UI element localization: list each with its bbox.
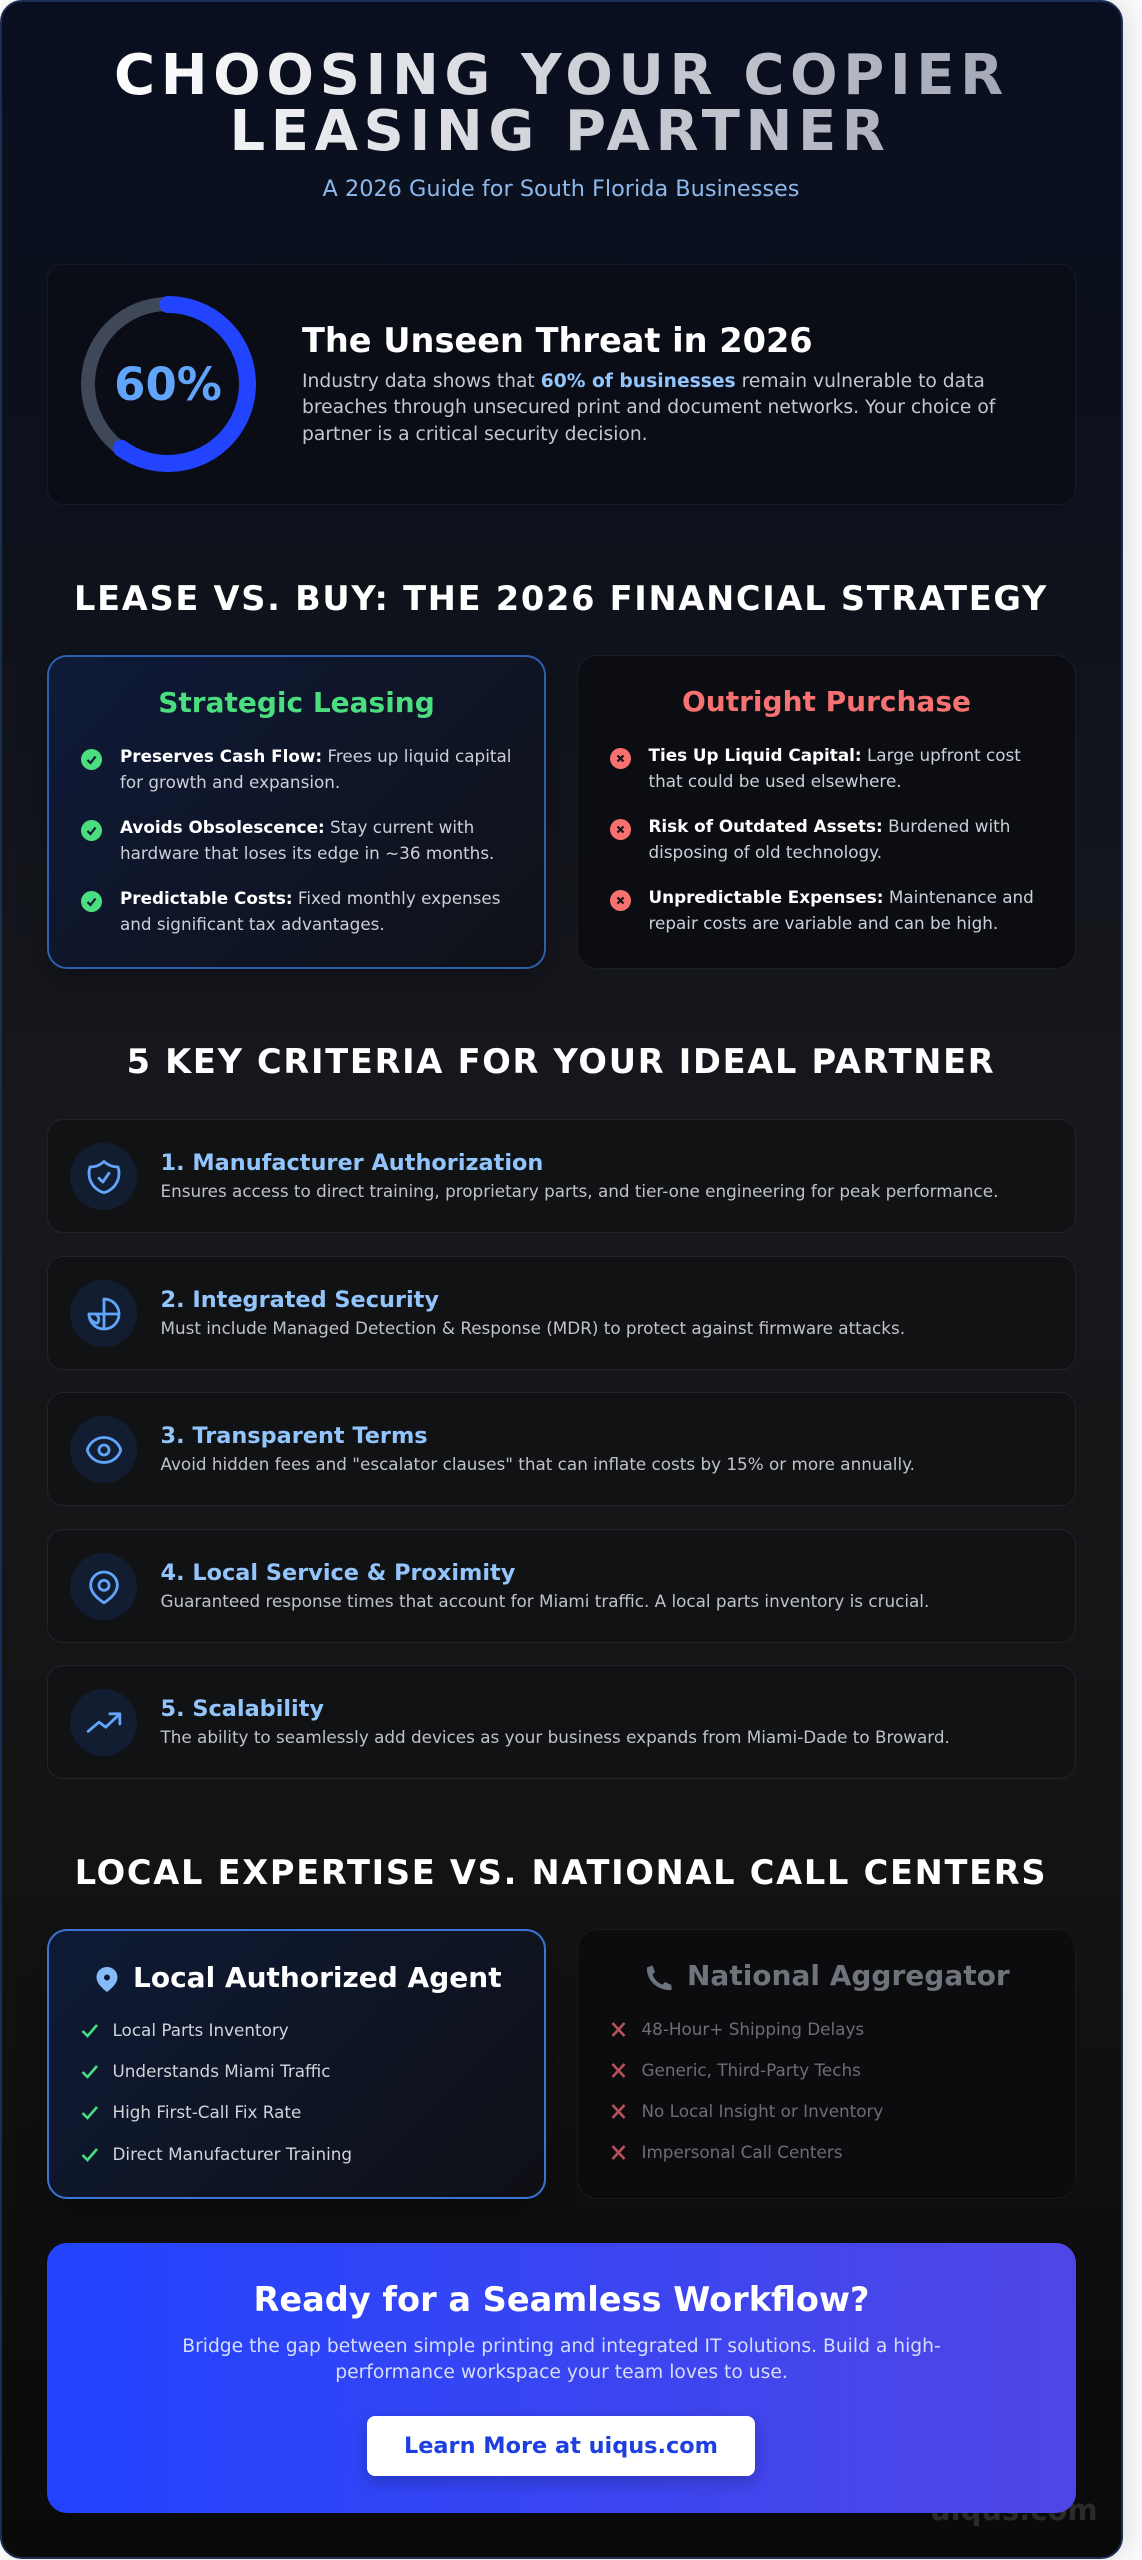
- item: liquid capital: [610, 745, 1021, 791]
- heading: local vs national: LOCAL EXPERTISE VS. NATIONAL CALL CENTERS: [75, 1853, 1047, 1892]
- heading: 5 key criteria: 5 KEY CRITERIA FOR YOUR IDEAL PARTNER: [127, 1042, 995, 1081]
- item: unpredictable expenses: Unpredictable Expenses: Maintenance and: [648, 887, 1034, 907]
- heading: lease vs buy: LEASE VS. BUY: THE 2026 FINANCIAL STRATEGY: [74, 579, 1048, 618]
- threat heading: The Unseen Threat in 2026: [302, 321, 813, 360]
- panel: national aggregator: Generic, Third-Party Techs: [642, 2060, 861, 2080]
- list item: [612, 2142, 842, 2162]
- item: liquid capital: that could be used elsewhere.: [648, 771, 902, 791]
- panel: local authorized agent: Direct Manufacturer Training: [112, 2144, 352, 2164]
- list item: [82, 2144, 352, 2164]
- button: Learn More at uiqus.com: [404, 2433, 718, 2459]
- threat body text: Industry data shows that 60% of businesses remain vulnerable to data: [302, 371, 985, 392]
- cta text: [182, 2336, 941, 2383]
- item: predictable costs: [81, 888, 500, 934]
- threat body text: partner is a critical security decision.: [302, 424, 648, 445]
- panel: strategic leasing: [47, 655, 546, 969]
- title: CHOOSING YOUR COPIER: [114, 43, 1009, 108]
- button: [367, 2416, 755, 2476]
- donut chart: 60%: 60%: [114, 358, 222, 411]
- item: unpredictable expenses: [610, 887, 1034, 933]
- list item: [612, 2101, 883, 2121]
- icon: eye: [70, 1416, 137, 1483]
- panel: national aggregator: 48-Hour+ Shipping Delays: [642, 2019, 864, 2039]
- item: cash flow: Preserves Cash Flow: Frees up liquid capital: [120, 746, 511, 766]
- criterion 1: [47, 1119, 1076, 1233]
- item: outdated assets: [610, 816, 1010, 862]
- item: obsolescence: [81, 817, 494, 863]
- threat body text: [302, 371, 996, 445]
- threat body text: breaches through unsecured print and document networks. Your choice of: [302, 397, 995, 418]
- list item: [612, 2019, 864, 2039]
- card title: National Aggregator: [687, 1959, 1010, 1992]
- criterion 5: [47, 1665, 1076, 1779]
- icon: trending up: [70, 1689, 137, 1756]
- criterion 5: The ability to seamlessly add devices as your business expands from Miami-Dade to Broward.: [160, 1727, 950, 1747]
- donut chart: 60%: [81, 296, 256, 472]
- cta heading: Ready for a Seamless Workflow?: [254, 2280, 869, 2319]
- header: [114, 43, 1009, 202]
- item: outdated assets: disposing of old technology.: [648, 842, 882, 862]
- list item: [82, 2102, 301, 2122]
- criterion 1: Ensures access to direct training, proprietary parts, and tier-one engineering for peak performance.: [160, 1181, 998, 1201]
- criterion 2: Must include Managed Detection & Response (MDR) to protect against firmware attacks.: [160, 1318, 905, 1338]
- title: LEASING PARTNER: [229, 99, 891, 164]
- cta text: Bridge the gap between simple printing and integrated IT solutions. Build a high-: [182, 2336, 941, 2357]
- card title: Strategic Leasing: [158, 686, 435, 719]
- panel: local authorized agent: Understands Miami Traffic: [112, 2061, 330, 2081]
- icon: map pin: [96, 1967, 118, 1992]
- criterion 1: 1. Manufacturer Authorization: [160, 1150, 543, 1176]
- subtitle: A 2026 Guide for South Florida Businesses: [323, 176, 799, 202]
- criterion 4: 4. Local Service & Proximity: [160, 1560, 515, 1586]
- card title: Outright Purchase: [682, 685, 971, 718]
- criterion 2: 2. Integrated Security: [160, 1287, 439, 1313]
- criterion 3: 3. Transparent Terms: [160, 1423, 428, 1449]
- title: [114, 48, 1006, 160]
- item: predictable costs: Predictable Costs: Fixed monthly expenses: [120, 888, 500, 908]
- item: unpredictable expenses: repair costs are variable and can be high.: [648, 913, 998, 933]
- criterion 3: [47, 1392, 1076, 1506]
- item: predictable costs: and significant tax advantages.: [120, 914, 385, 934]
- card title: Local Authorized Agent: [133, 1961, 502, 1994]
- criterion 5: 5. Scalability: [160, 1696, 324, 1722]
- panel: local authorized agent: High First-Call Fix Rate: [112, 2102, 301, 2122]
- panel: unseen threat: [47, 264, 1076, 505]
- panel: national aggregator: Impersonal Call Centers: [642, 2142, 842, 2162]
- criterion 4: [47, 1529, 1076, 1643]
- cta text: performance workspace your team loves to use.: [335, 2362, 788, 2383]
- criterion 2: [47, 1256, 1076, 1370]
- list item: [612, 2060, 861, 2080]
- panel: local authorized agent: [47, 1929, 546, 2199]
- panel: national aggregator: [577, 1929, 1076, 2199]
- item: obsolescence: hardware that loses its edge in ~36 months.: [120, 843, 494, 863]
- panel: outright purchase: [577, 655, 1076, 969]
- panel: call to action: [47, 2243, 1076, 2513]
- item: liquid capital: Ties Up Liquid Capital: Large upfront cost: [648, 745, 1021, 765]
- icon: phone: [646, 1966, 672, 1990]
- icon: security pie: [70, 1280, 137, 1347]
- item: cash flow: for growth and expansion.: [120, 772, 340, 792]
- list item: [82, 2020, 289, 2040]
- item: outdated assets: Risk of Outdated Assets: Burdened with: [648, 816, 1010, 836]
- watermark: uiqus.com: [930, 2493, 1098, 2527]
- panel: local authorized agent: Local Parts Inventory: [112, 2020, 289, 2040]
- panel: national aggregator: No Local Insight or Inventory: [642, 2101, 883, 2121]
- item: obsolescence: Avoids Obsolescence: Stay current with: [120, 817, 474, 837]
- item: cash flow: [81, 746, 511, 792]
- criterion 4: Guaranteed response times that account for Miami traffic. A local parts inventory is crucial.: [160, 1591, 929, 1611]
- icon: location pin: [70, 1553, 137, 1620]
- criterion 3: Avoid hidden fees and "escalator clauses" that can inflate costs by 15% or more annually.: [160, 1454, 915, 1474]
- list item: [82, 2061, 330, 2081]
- icon: shield: [70, 1143, 137, 1210]
